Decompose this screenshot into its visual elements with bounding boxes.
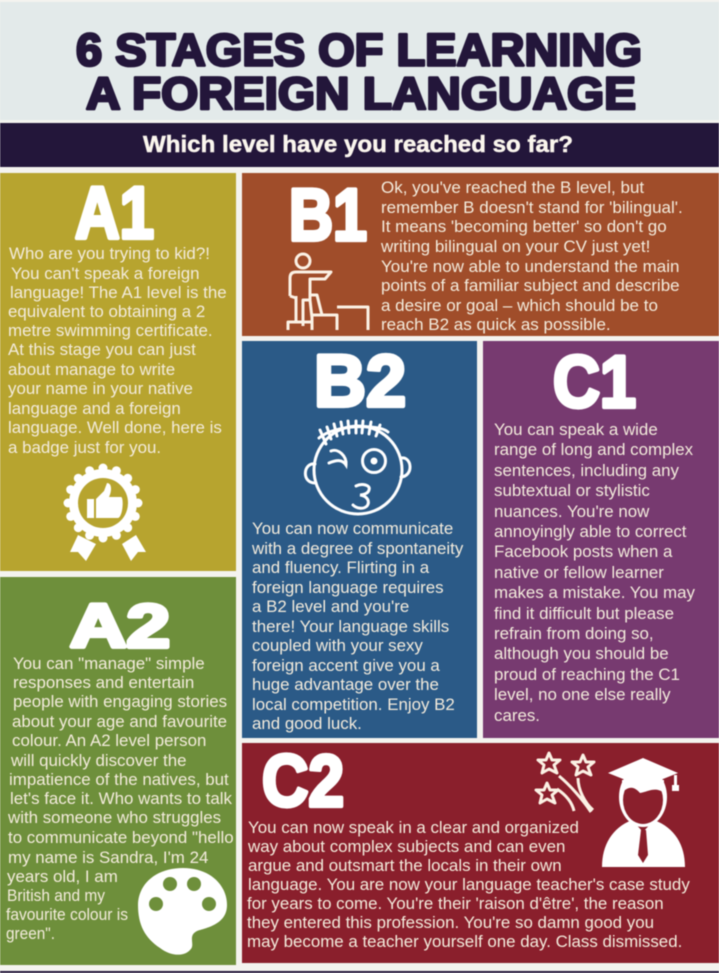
panel: C1 (483, 341, 719, 738)
text: A1 description: metre swimming certificate. (8, 321, 213, 340)
text: C1 description: subtextual or stylistic (494, 481, 650, 500)
text: C1 description: level, no one else really (494, 685, 671, 704)
text: A2 description: will quickly discover the (10, 751, 187, 770)
text: A2 description: British and my (7, 886, 106, 905)
text: C1 description: refrain from doing so, (494, 624, 654, 643)
text: A1 description: You can't speak a foreign (11, 264, 200, 283)
text: A1 description: about manage to write (8, 360, 175, 379)
text: A2 description: green". (6, 924, 55, 943)
text: C1 description: makes a mistake. You may (494, 583, 695, 602)
icon: winking kissing face (305, 421, 410, 514)
panel: B1 (242, 173, 719, 336)
icon: graduate (602, 758, 685, 867)
subtitle band: Which level have you reached so far? (143, 131, 573, 157)
text: A1 description: a badge just for you. (8, 438, 161, 457)
text: B2 description: with a degree of spontaneity (251, 539, 464, 558)
icon: palette (138, 868, 227, 955)
text: B2 description: You can now communicate (252, 519, 453, 538)
title: 6 STAGES OF LEARNING (76, 24, 642, 76)
text: C1 description: nuances. You're now (494, 502, 650, 521)
text: A2 description: with someone who struggles (7, 808, 221, 827)
text: C1 description: although you should be (494, 644, 669, 663)
text: B1 description: Ok, you've reached the B level, but (381, 178, 644, 197)
text: C2 description: language. You are now your language teacher's case study (248, 875, 690, 894)
text: A1 description (8, 244, 227, 457)
text: A2 description: people with engaging stories (13, 692, 227, 711)
text: A2 description (6, 654, 234, 943)
text: A1 description: language and a foreign (8, 399, 181, 418)
text: B2 description: and good luck. (252, 714, 362, 733)
text: B1 description: remember B doesn't stand for 'bilingual'. (381, 198, 683, 217)
text: C1 description: range of long and complex (494, 440, 694, 459)
panel: A1 (0, 173, 236, 571)
text: A2 description: impatience of the natives, but (9, 770, 229, 789)
text: C1 description: proud of reaching the C1 (494, 665, 680, 684)
subtitle band (0, 123, 719, 167)
text: A2 description: about your age and favourite (12, 712, 227, 731)
title: A FOREIGN LANGUAGE (86, 68, 636, 119)
text: A2 description: responses and entertain (13, 673, 194, 692)
text: C2 description (247, 818, 690, 951)
heading: B2: B2 (314, 341, 406, 422)
text: B1 description: a desire or goal – which should be to (381, 296, 658, 315)
text: C2 description: for years to come. You're their 'raison d'être', the reason (247, 894, 664, 913)
text: B1 description (380, 178, 683, 334)
title (76, 24, 642, 119)
header background (0, 2, 719, 120)
panel: C2 (242, 741, 719, 963)
text: B1 description: points of a familiar subject and describe (381, 276, 680, 295)
text: A2 description: my name is Sandra, I'm 24 (8, 848, 208, 867)
text: A1 description: language. Well done, here is (8, 418, 222, 437)
text: B2 description (251, 519, 464, 733)
text: A1 description: equivalent to obtaining a 2 (8, 302, 205, 321)
text: C1 description: find it difficult but please (494, 604, 674, 623)
text: C2 description: way about complex subjects and can even (247, 837, 565, 856)
heading: B1: B1 (289, 175, 367, 256)
text: B2 description: huge advantage over the (252, 675, 439, 694)
panel: B2 (242, 341, 477, 738)
text: A1 description: At this stage you can just (8, 340, 196, 359)
text: B1 description: It means 'becoming better' so don't go (381, 217, 667, 236)
text: B2 description: foreign accent give you a (252, 656, 440, 675)
text: B2 description: there! Your language skills (252, 617, 449, 636)
text: C1 description: Facebook posts when a (494, 542, 673, 561)
text: C2 description: argue and outsmart the locals in their own (248, 856, 562, 875)
text: A2 description: let's face it. Who wants to talk (10, 789, 233, 808)
text: C2 description: they entered this profession. You're so damn good you (247, 913, 654, 932)
text: B1 description: reach B2 as quick as possible. (381, 315, 611, 334)
text: C1 description: sentences, including any (494, 461, 680, 480)
text: C1 description: You can speak a wide (494, 420, 658, 439)
text: B2 description: coupled with your sexy (252, 636, 423, 655)
text: C1 description: cares. (494, 706, 540, 725)
icon: thumbs-up badge (64, 464, 146, 561)
text: A2 description: colour. An A2 level person (12, 731, 206, 750)
text: C2 description: may become a teacher yourself one day. Class dismissed. (247, 932, 682, 951)
heading: C2: C2 (262, 741, 344, 822)
text: A1 description: Who are you trying to kid?! (9, 244, 210, 263)
panel: A2 (0, 577, 236, 965)
text: B2 description: and fluency. Flirting in a (252, 558, 430, 577)
text: C1 description: native or fellow learner (494, 563, 664, 582)
text: B1 description: writing bilingual on your CV just yet! (380, 237, 650, 256)
text: A1 description: your name in your native (8, 379, 193, 398)
heading: C1: C1 (553, 342, 636, 423)
text: C1 description (494, 420, 695, 725)
text: C2 description: You can now speak in a clear and organized (248, 818, 579, 837)
icon: fireworks (536, 753, 594, 812)
icon: person climbing steps (288, 254, 368, 330)
text: B1 description: You're now able to understand the main (381, 257, 679, 276)
text: A1 description: language! The A1 level is the (10, 283, 227, 302)
text: C1 description: annoyingly able to correct (494, 522, 687, 541)
text: B2 description: a B2 level and you're (252, 597, 409, 616)
text: A2 description: years old, I am (7, 867, 118, 886)
text: B2 description: local competition. Enjoy B2 (252, 695, 455, 714)
text: A2 description: to communicate beyond "hello (8, 828, 234, 847)
text: A2 description: favourite colour is (6, 905, 128, 924)
heading: A1: A1 (75, 173, 154, 254)
text: A2 description: You can "manage" simple (13, 654, 205, 673)
heading: A2: A2 (70, 592, 170, 660)
text: B2 description: foreign language requires (252, 578, 444, 597)
